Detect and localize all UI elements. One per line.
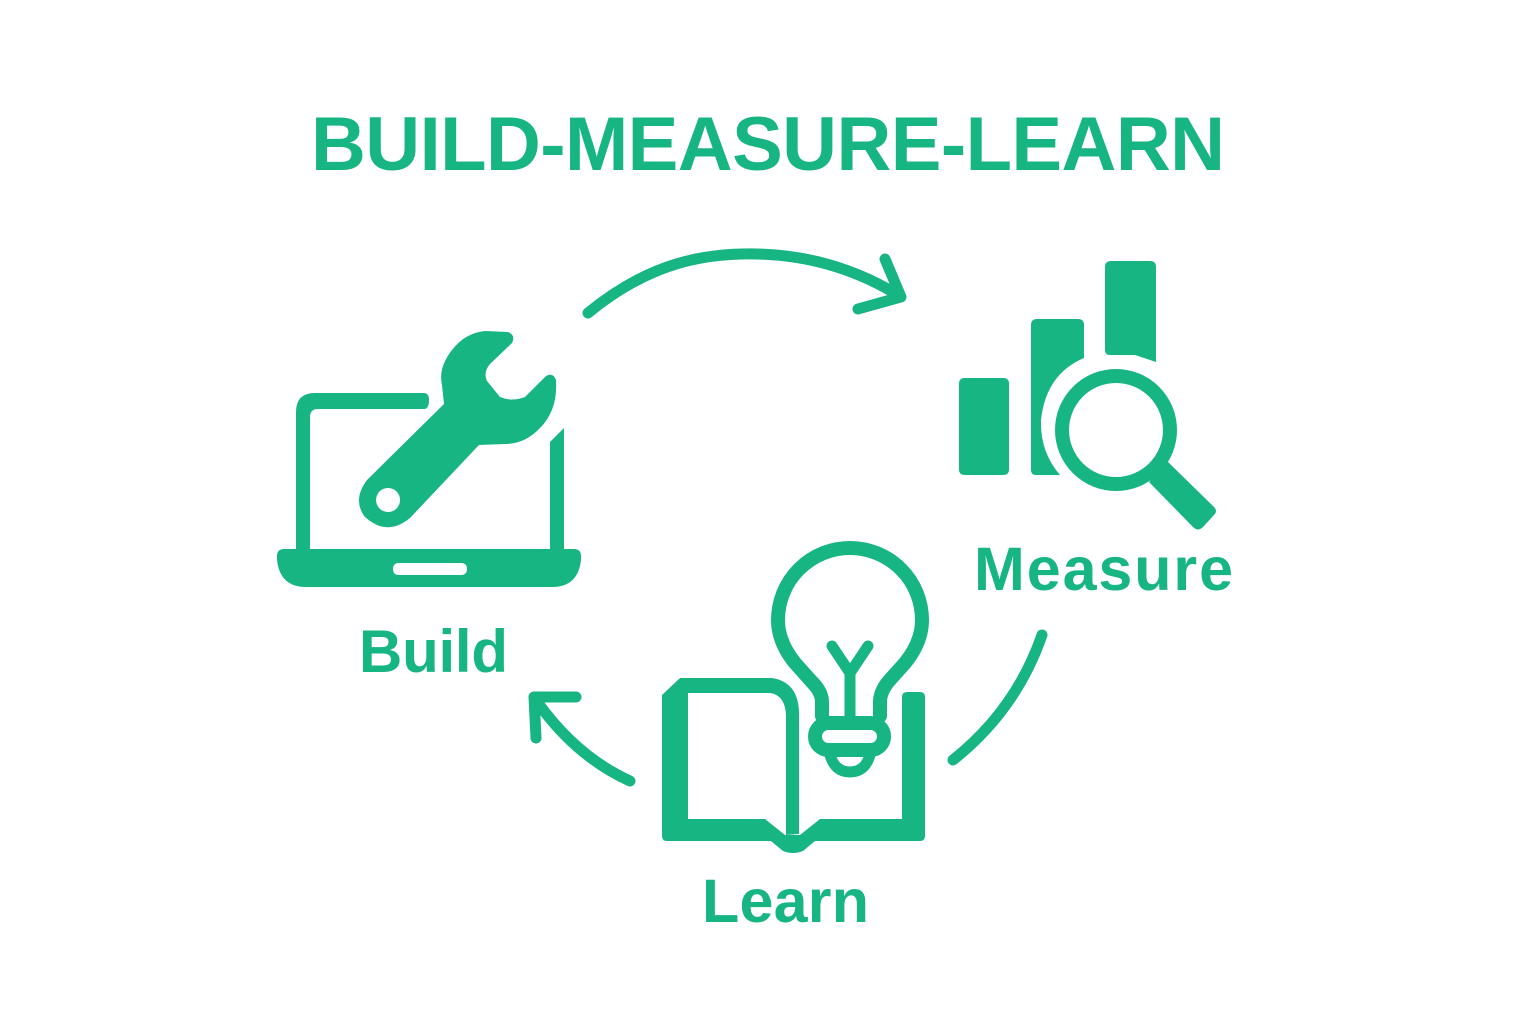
label: Build: Build	[359, 618, 508, 685]
arrow: learn to build	[534, 697, 630, 781]
label: Measure: Measure	[974, 535, 1233, 603]
icon: laptop with wrench	[277, 331, 581, 587]
laptop screen	[296, 393, 564, 550]
icon: bar chart with magnifier	[959, 261, 1216, 530]
arrow: build to measure	[588, 254, 901, 313]
wrench	[359, 331, 556, 527]
icon: book with lightbulb	[662, 548, 925, 853]
lightbulb	[778, 548, 922, 772]
magnifier	[1062, 376, 1216, 530]
label: Learn: Learn	[702, 867, 869, 935]
laptop base	[277, 549, 581, 587]
bars	[959, 261, 1156, 475]
arrow: measure to learn	[953, 635, 1042, 760]
title: BUILD-MEASURE-LEARN	[311, 102, 1225, 187]
book	[662, 678, 925, 853]
